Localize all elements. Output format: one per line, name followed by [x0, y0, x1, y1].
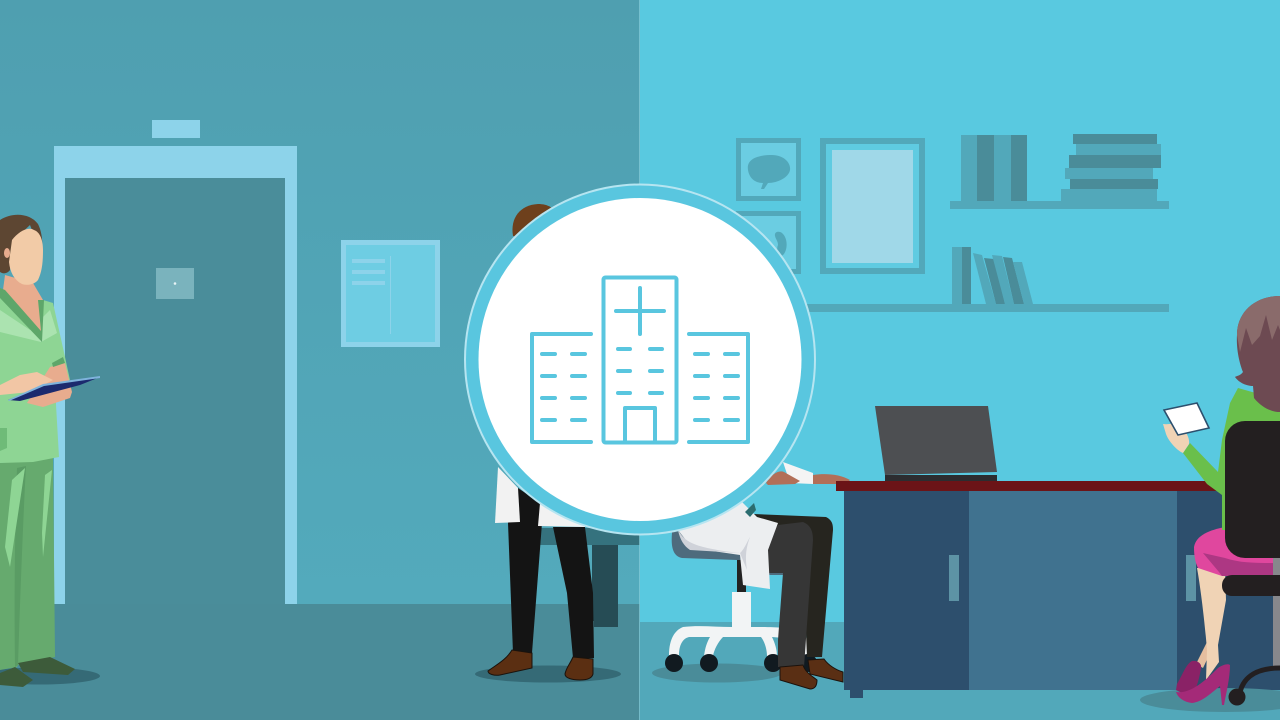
hair [1235, 296, 1280, 412]
seated doctor [678, 462, 850, 689]
pocket [0, 428, 7, 451]
door [65, 178, 285, 604]
panel: left corridor room [0, 0, 640, 720]
hand [0, 372, 53, 395]
shoes [18, 657, 75, 675]
icon: hospital buildings [532, 278, 748, 442]
lower shelf with books [805, 247, 1169, 312]
scrub top [0, 288, 70, 463]
icon: right wing [689, 334, 748, 442]
panel: right office room [639, 0, 1280, 720]
waiting room table [540, 528, 640, 627]
neck [3, 275, 43, 338]
desk [836, 481, 1280, 698]
framed picture: kidney [738, 214, 798, 272]
hair [0, 215, 42, 273]
nurse with clipboard [0, 215, 100, 687]
shadow: seated doctor [652, 664, 782, 682]
lab coat [495, 467, 520, 523]
face [9, 229, 43, 285]
skirt [1194, 527, 1273, 576]
clipboard [8, 377, 100, 401]
desk top [836, 481, 1222, 491]
shadow: nurse [0, 668, 100, 684]
lab coat [678, 500, 778, 589]
shoes [808, 659, 843, 682]
arm [27, 363, 72, 407]
ear [4, 248, 10, 258]
hair [512, 204, 556, 240]
shoes [488, 650, 532, 675]
door handle plate [156, 268, 194, 299]
sleeve and hands [783, 462, 813, 484]
icon: left wing [532, 334, 591, 442]
door sign [152, 120, 200, 138]
trousers [753, 514, 833, 657]
heels [1176, 661, 1201, 697]
seated woman with tablet [1163, 296, 1280, 706]
door frame [54, 146, 297, 604]
central badge circle [464, 184, 816, 536]
shadow: woman [1140, 688, 1280, 712]
office chair [665, 530, 817, 672]
shadow: standing doctor [475, 666, 621, 682]
legs [1196, 568, 1225, 668]
framed picture: large [823, 141, 922, 271]
icon: centre tower [604, 278, 676, 442]
chair [1273, 555, 1280, 667]
trousers [0, 458, 55, 670]
hand [1163, 423, 1189, 453]
collar [0, 288, 44, 342]
wall poster [341, 240, 440, 347]
tablet [1164, 403, 1209, 435]
standing doctor [488, 204, 594, 680]
sweater [1183, 388, 1280, 530]
laptop [875, 406, 997, 482]
framed picture: brain [738, 140, 798, 198]
trousers [508, 488, 542, 653]
upper shelf with books [950, 134, 1169, 209]
